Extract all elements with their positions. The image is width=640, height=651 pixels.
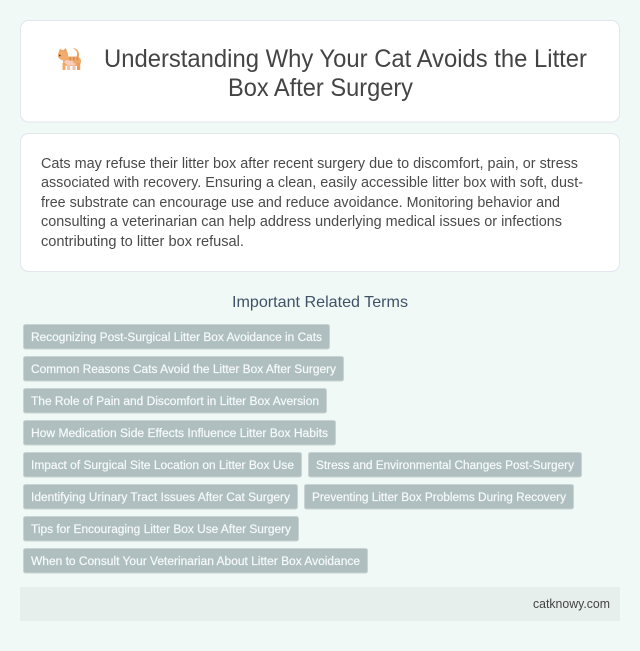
footer: site name: catknowy.com: [533, 597, 610, 611]
summary line 1: Cats may refuse their litter box after recent surgery due to discomfort, pain, or stress: [41, 155, 578, 172]
tag 4: How Medication Side Effects Influence Litter Box Habits: [31, 426, 328, 440]
tag 2: [24, 356, 344, 381]
tag 3: The Role of Pain and Discomfort in Litter Box Aversion: [31, 394, 319, 408]
tag 8: Preventing Litter Box Problems During Recovery: [312, 490, 567, 504]
tag 1: [24, 324, 330, 349]
footer bar: [20, 587, 620, 621]
heading: related terms: Important Related Terms: [232, 294, 408, 311]
tag 2: Common Reasons Cats Avoid the Litter Box After Surgery: [31, 362, 337, 376]
tag 8: [304, 484, 574, 509]
tag 9: [24, 516, 298, 541]
tag 10: [24, 548, 368, 573]
tag 10: When to Consult Your Veterinarian About Litter Box Avoidance: [31, 554, 360, 568]
tag 7: Identifying Urinary Tract Issues After Cat Surgery: [31, 490, 291, 504]
tag 3: [24, 388, 326, 413]
tag 9: Tips for Encouraging Litter Box Use After Surgery: [31, 522, 292, 536]
tag 5: Impact of Surgical Site Location on Litter Box Use: [31, 458, 294, 472]
panel: title card: [20, 20, 620, 122]
tag 6: Stress and Environmental Changes Post-Surgery: [316, 458, 575, 472]
tag 6: [308, 452, 582, 477]
summary line 3: free substrate can encourage use and reduce avoidance. Monitoring behavior and: [41, 194, 560, 211]
tag 5: [24, 452, 302, 477]
title line 2: Box After Surgery: [228, 75, 414, 102]
tag list: [24, 324, 582, 573]
summary line 4: consulting a veterinarian can help address underlying medical issues or infections: [41, 213, 562, 230]
tag 4: [24, 420, 336, 445]
summary line 2: associated with recovery. Ensuring a clean, easily accessible litter box with soft, dust-: [41, 174, 583, 191]
tag 7: [24, 484, 298, 509]
panel: summary card: [20, 134, 620, 272]
summary line 5: contributing to litter box refusal.: [41, 233, 244, 250]
title line 1: Understanding Why Your Cat Avoids the Litter: [104, 46, 587, 73]
tag 1: Recognizing Post-Surgical Litter Box Avoidance in Cats: [31, 330, 322, 344]
icon: orange cat: [58, 48, 81, 70]
